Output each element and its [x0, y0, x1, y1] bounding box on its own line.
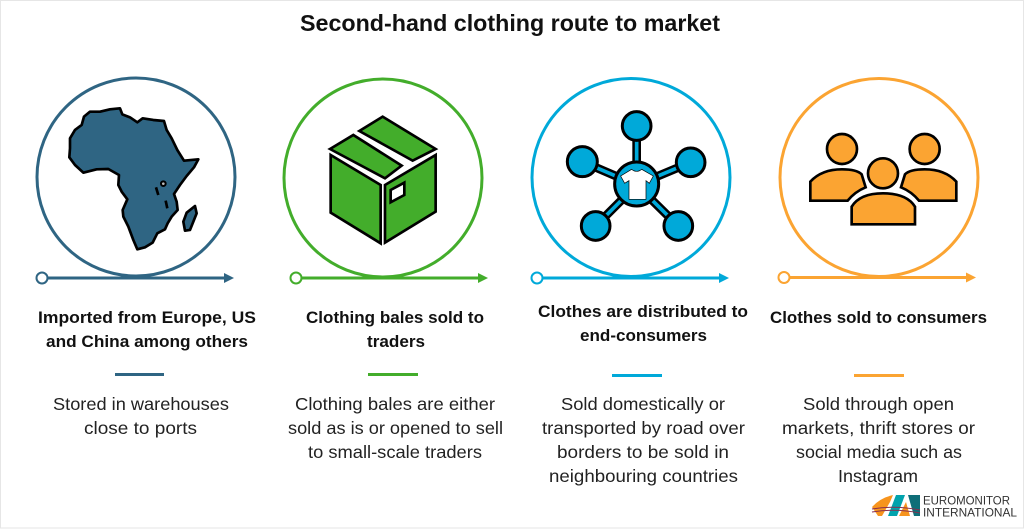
- text: bales detail: to small-scale traders: [308, 442, 482, 462]
- text: distribution detail: neighbouring countries: [549, 466, 738, 486]
- text: distribution detail: Sold domestically or: [561, 394, 725, 414]
- title: Second-hand clothing route to market: [300, 10, 720, 36]
- text: imported detail: Stored in warehouses: [53, 394, 229, 414]
- text: consumers detail: [782, 394, 975, 486]
- text: logo wordmark: INTERNATIONAL: [923, 506, 1017, 520]
- panel: imported: [36, 78, 256, 438]
- icon: three people: [810, 134, 956, 224]
- text: bales detail: [288, 394, 503, 462]
- circle with arrow: distribution: [532, 78, 730, 284]
- text: logo wordmark: EUROMONITOR: [923, 494, 1010, 508]
- heading: imported: Imported from Europe, US: [38, 308, 256, 327]
- panel: consumers: [770, 78, 987, 486]
- heading: distribution: Clothes are distributed to: [538, 302, 748, 321]
- heading: distribution: [538, 302, 748, 345]
- heading: bales: traders: [367, 332, 425, 351]
- heading: bales: [306, 308, 484, 351]
- text: imported detail: close to ports: [84, 418, 197, 438]
- circle with arrow: bales: [284, 79, 488, 284]
- heading: bales: Clothing bales sold to: [306, 308, 484, 327]
- text: consumers detail: Sold through open: [803, 394, 954, 414]
- icon: distribution network with shirt: [567, 112, 705, 240]
- panel: bales: [284, 79, 503, 462]
- heading: distribution: end-consumers: [580, 326, 707, 345]
- logo: Euromonitor International: [872, 494, 1017, 520]
- icon: Africa map: [69, 108, 198, 249]
- text: logo wordmark: [923, 494, 1017, 520]
- text: bales detail: sold as is or opened to sell: [288, 418, 503, 438]
- text: consumers detail: social media such as: [796, 442, 962, 462]
- icon: logo bridge: [872, 495, 920, 516]
- text: distribution detail: [542, 394, 745, 486]
- text: imported detail: [53, 394, 229, 438]
- heading: imported: and China among others: [46, 332, 248, 351]
- text: consumers detail: markets, thrift stores or: [782, 418, 975, 438]
- icon: cardboard box: [330, 117, 436, 243]
- text: consumers detail: Instagram: [838, 466, 918, 486]
- panel: distribution: [532, 78, 748, 486]
- heading: imported: [38, 308, 256, 351]
- heading: consumers: Clothes sold to consumers: [770, 308, 987, 327]
- text: distribution detail: borders to be sold in: [557, 442, 729, 462]
- circle with arrow: imported: [36, 78, 235, 284]
- text: bales detail: Clothing bales are either: [295, 394, 495, 414]
- text: distribution detail: transported by road over: [542, 418, 745, 438]
- circle with arrow: consumers: [778, 78, 978, 283]
